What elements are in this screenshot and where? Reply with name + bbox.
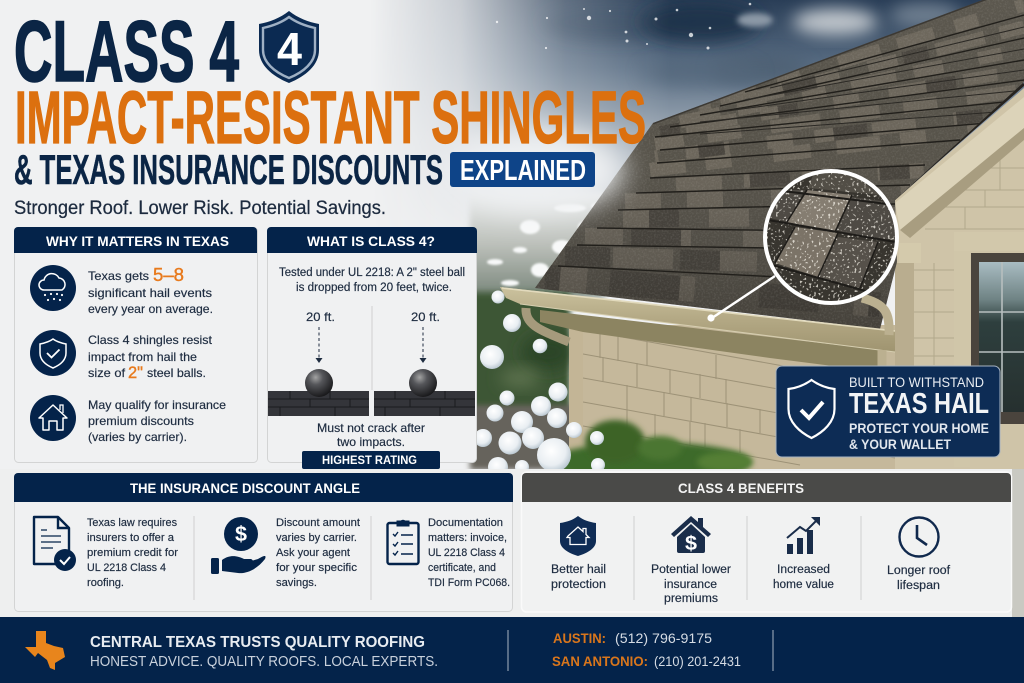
- text: hail events: Texas gets: [88, 269, 149, 283]
- mist fading the roof into the title area: [447, 128, 623, 212]
- hail covered ground: [470, 192, 615, 470]
- footer headline: CENTRAL TEXAS TRUSTS QUALITY ROOFING: [90, 634, 425, 651]
- text: documentation: TDI Form PC068.: [428, 577, 510, 589]
- storm sky: [388, 0, 1024, 192]
- benefit: longer roof lifespan: Longer roof: [887, 565, 951, 577]
- icon: clipboard checklist: [388, 520, 418, 564]
- benefit: lower insurance premiums: [651, 516, 731, 605]
- benefit: increased home value: [773, 517, 834, 591]
- benefit: longer roof lifespan: [887, 518, 951, 592]
- drop test diagram: first impact: [268, 310, 369, 416]
- benefit: better hail protection: [551, 516, 606, 591]
- benefit: lower insurance premiums: premiums: [664, 593, 718, 605]
- icon: dollar in hand: $: [235, 523, 247, 546]
- panel: what is class 4: [267, 227, 477, 469]
- panel: class 4 benefits: [522, 472, 1012, 612]
- panel: the insurance discount angle: [14, 473, 513, 612]
- panel: why it matters in Texas: [14, 227, 258, 462]
- explained tag: EXPLAINED: [460, 155, 586, 187]
- light band behind the lower panels: [0, 469, 1024, 617]
- hero photo: storm sky, roof and house: [300, 0, 1024, 482]
- text: impact rating: 2": [128, 363, 143, 382]
- text: Texas law: roofing.: [87, 577, 124, 589]
- callout text: & YOUR WALLET: [849, 437, 952, 452]
- text: Texas law: Texas law requires: [87, 517, 177, 529]
- benefit: lower insurance premiums: insurance: [664, 579, 717, 591]
- callout text: [849, 375, 989, 452]
- tagline: Stronger Roof. Lower Risk. Potential Savings.: [14, 198, 386, 219]
- text: hail events: [88, 265, 213, 316]
- footer band: [0, 617, 1024, 683]
- text: Texas law: [87, 517, 178, 589]
- icon: house: [30, 395, 76, 441]
- pass criterion: [317, 421, 425, 449]
- test description: Tested under UL 2218: A 2" steel ball: [279, 267, 465, 279]
- icon: dollar in hand: [211, 517, 266, 574]
- drop test diagram: second impact: 20 ft.: [411, 310, 440, 324]
- text: documentation: certificate, and: [428, 562, 496, 574]
- text: documentation: UL 2218 Class 4: [428, 547, 505, 559]
- right downspout: [862, 298, 889, 366]
- hail balls: [474, 290, 605, 477]
- phone: San Antonio: SAN ANTONIO:: [552, 654, 648, 669]
- callout: built to withstand Texas hail: [776, 366, 1000, 457]
- shrubs: [550, 420, 753, 482]
- benefit: better hail protection: protection: [551, 579, 606, 591]
- pass criterion: two impacts.: [337, 435, 405, 449]
- panel heading: THE INSURANCE DISCOUNT ANGLE: [130, 480, 360, 496]
- icon: shield check: [30, 330, 76, 376]
- phone: Austin: [553, 631, 712, 646]
- benefit: lower insurance premiums: $: [685, 533, 697, 555]
- text: Texas law: insurers to offer a: [87, 532, 175, 544]
- highest rating tag: HIGHEST RATING: [322, 453, 417, 467]
- drop test diagram: first impact: 20 ft.: [306, 310, 335, 324]
- drop test diagram: second impact: [374, 310, 475, 416]
- text: discount varies: varies by carrier.: [276, 532, 357, 544]
- text: documentation: [428, 517, 510, 589]
- text: discount varies: [276, 517, 360, 589]
- text: discount varies: savings.: [276, 577, 317, 589]
- right wall and gable: [893, 84, 1024, 472]
- callout text: BUILT TO WITHSTAND: [849, 375, 984, 390]
- panel heading: [14, 473, 513, 502]
- phone: San Antonio: (210) 201-2431: [654, 654, 741, 669]
- icon: class 4 shield badge: [259, 11, 319, 83]
- text: insurance discounts: premium discounts: [88, 414, 194, 428]
- text: Texas law: premium credit for: [87, 547, 178, 559]
- window: [971, 253, 1024, 424]
- pass criterion: Must not crack after: [317, 421, 425, 435]
- test description: is dropped from 20 feet, twice.: [296, 282, 452, 294]
- text: documentation: matters: invoice,: [428, 532, 507, 544]
- text: impact rating: impact from hail the: [88, 350, 197, 364]
- text: Texas law: UL 2218 Class 4: [87, 562, 166, 574]
- highest rating tag: [302, 451, 440, 469]
- benefit: lower insurance premiums: Potential lower: [651, 564, 731, 576]
- test description: [279, 267, 465, 294]
- text: hail events: 5–8: [153, 265, 184, 285]
- icon: Texas map: [25, 631, 65, 670]
- benefit: longer roof lifespan: lifespan: [897, 580, 940, 592]
- benefit: better hail protection: Better hail: [551, 564, 606, 576]
- pointer line from inset to roof edge: [707, 276, 775, 322]
- text: impact rating: steel balls.: [147, 366, 206, 380]
- panel heading: WHAT IS CLASS 4?: [307, 233, 435, 249]
- falling hail specks: [496, 3, 751, 49]
- text: hail events: every year on average.: [88, 302, 213, 316]
- icon: shield check: [788, 380, 834, 438]
- blurred right edge strip: [1012, 469, 1024, 617]
- panel heading: [14, 227, 257, 253]
- panel heading: WHY IT MATTERS IN TEXAS: [46, 233, 229, 249]
- shingled roof: [530, 0, 1024, 335]
- panel heading: CLASS 4 BENEFITS: [678, 480, 804, 496]
- title line: texas insurance discounts: & TEXAS INSURANCE DISCOUNTS: [14, 146, 443, 193]
- icon: class 4 shield badge: 4: [277, 23, 302, 75]
- benefit: increased home value: Increased: [777, 564, 830, 576]
- icon: hail cloud: [30, 265, 76, 311]
- text: discount varies: for your specific: [276, 562, 358, 574]
- text: insurance discounts: (varies by carrier).: [88, 430, 187, 444]
- footer tagline: HONEST ADVICE. QUALITY ROOFS. LOCAL EXPERTS.: [90, 653, 438, 670]
- text: impact rating: size of: [88, 366, 126, 380]
- phone: Austin: (512) 796-9175: [615, 631, 712, 646]
- text: discount varies: Discount amount: [276, 517, 360, 529]
- text: insurance discounts: [88, 398, 226, 444]
- soffit under gutter: [540, 310, 880, 372]
- brick wall under eave: [569, 325, 900, 472]
- title line: CLASS 4: CLASS 4: [14, 4, 239, 100]
- panel heading: [522, 473, 1011, 502]
- callout text: PROTECT YOUR HOME: [849, 421, 989, 436]
- icon: document with check: [34, 517, 76, 571]
- downspout: [526, 308, 569, 342]
- text: documentation: Documentation: [428, 517, 503, 529]
- benefit: increased home value: home value: [773, 579, 834, 591]
- text: discount varies: Ask your agent: [276, 547, 350, 559]
- phone: San Antonio: [552, 654, 741, 669]
- text: insurance discounts: May qualify for insurance: [88, 398, 226, 412]
- panel heading: [267, 227, 477, 253]
- text: hail events: significant hail events: [88, 286, 212, 300]
- text: impact rating: Class 4 shingles resist: [88, 333, 213, 347]
- text: impact rating: [88, 333, 213, 382]
- callout text: TEXAS HAIL: [849, 388, 989, 420]
- gutter: [500, 287, 895, 352]
- phone: Austin: AUSTIN:: [553, 631, 606, 646]
- magnified shingle inset: [763, 169, 899, 305]
- title block: [14, 4, 646, 219]
